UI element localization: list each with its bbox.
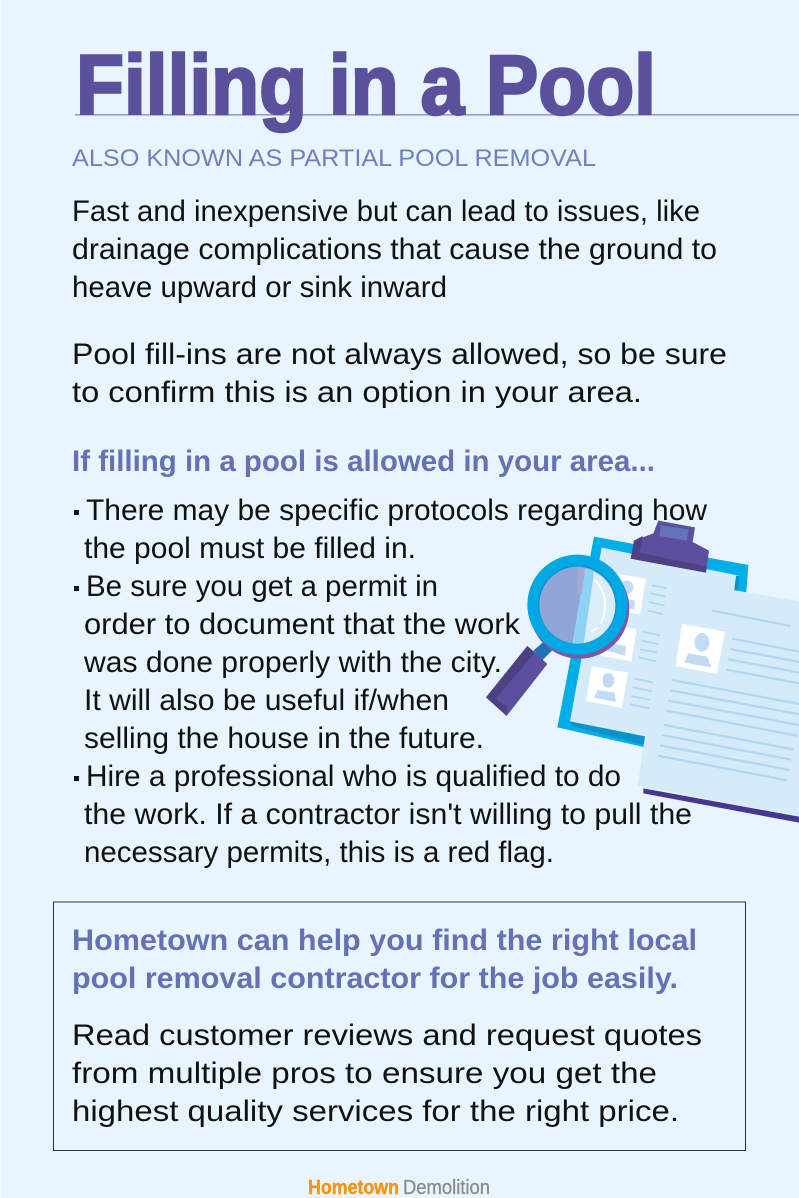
title rule (75, 114, 799, 116)
intro paragraph (72, 195, 717, 304)
callout heading: Hometown can help you find the right local (72, 924, 697, 957)
callout heading (72, 924, 697, 995)
permission paragraph: to confirm this is an option in your area. (72, 376, 642, 409)
section heading: If filling in a pool is allowed in your area... (72, 445, 655, 478)
icon: magnifying glass (486, 555, 629, 716)
bullet list: the pool must be filled in. (84, 532, 416, 565)
bullet list: the work. If a contractor isn't willing to pull the (84, 798, 692, 831)
title: Filling in a Pool (76, 38, 656, 132)
permission paragraph: Pool fill-ins are not always allowed, so be sure (72, 338, 727, 371)
callout box (54, 902, 746, 1150)
callout body (72, 1019, 702, 1128)
bullet list: selling the house in the future. (84, 722, 484, 755)
callout heading: pool removal contractor for the job easily. (72, 962, 678, 995)
bullet list: It will also be useful if/when (84, 684, 449, 717)
bullet list: necessary permits, this is a red flag. (84, 836, 554, 869)
illustration: clipboard and magnifying glass (486, 521, 799, 823)
bullet list: There may be specific protocols regarding how (86, 494, 708, 527)
icon: clipboard clip (631, 521, 709, 573)
bullet list: Hire a professional who is qualified to do (86, 760, 621, 793)
bullet list: Be sure you get a permit in (86, 570, 438, 603)
callout body: highest quality services for the right price. (72, 1095, 679, 1128)
callout body: Read customer reviews and request quotes (72, 1019, 702, 1052)
icon: document page (638, 579, 799, 823)
icon: clipboard board (557, 537, 748, 750)
callout body: from multiple pros to ensure you get the (72, 1057, 657, 1090)
intro paragraph: Fast and inexpensive but can lead to issues, like (72, 195, 700, 228)
intro paragraph: drainage complications that cause the ground to (72, 233, 717, 266)
permission paragraph (72, 338, 727, 409)
footer logo (308, 1177, 490, 1198)
icon: small profile cards (586, 573, 674, 709)
intro paragraph: heave upward or sink inward (72, 271, 447, 304)
bullet list (74, 494, 708, 869)
bullet list: was done properly with the city. (83, 646, 502, 679)
bullet list: order to document that the work (84, 608, 520, 641)
subtitle: ALSO KNOWN AS PARTIAL POOL REMOVAL (72, 145, 596, 172)
